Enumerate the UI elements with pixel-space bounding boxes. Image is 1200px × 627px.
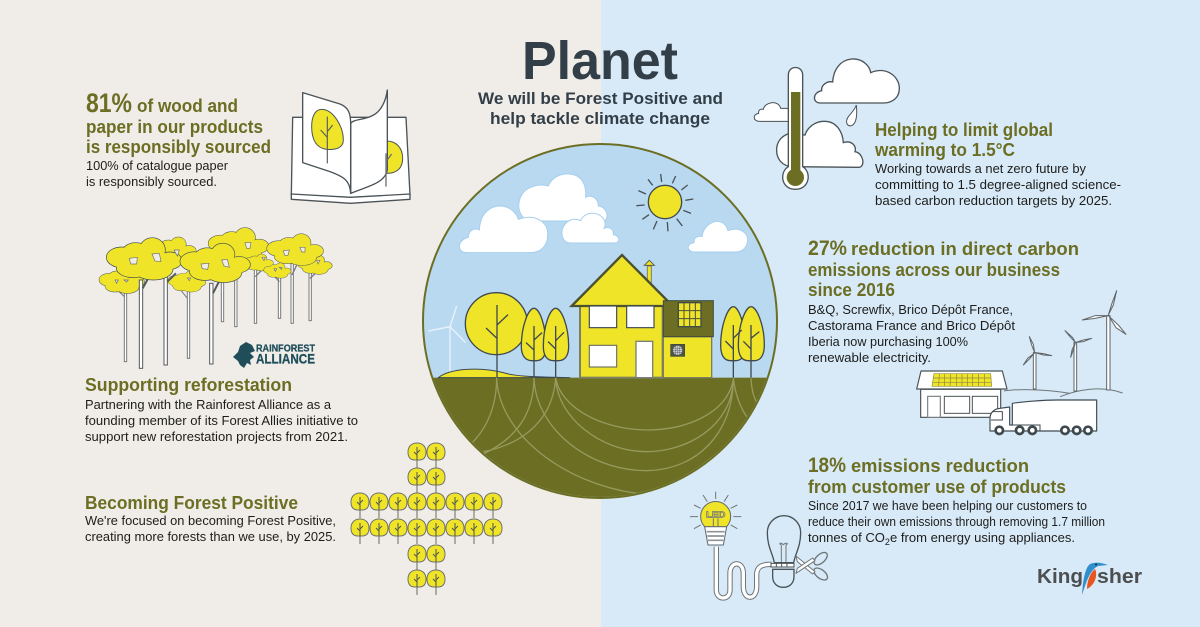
background: left beige panel <box>0 0 601 627</box>
central circle scene <box>420 144 790 511</box>
panel: 81% wood and paper text: paper in our products <box>86 117 263 137</box>
panel: helping to limit global warming text: warming to 1.5°C <box>874 140 1015 160</box>
icon: wind turbines, solar store and truck <box>917 291 1126 434</box>
panel: 27% reduction in direct carbon text <box>808 237 1079 365</box>
icon: plus sign of small trees <box>351 443 502 595</box>
panel: 27% reduction in direct carbon text: emissions across our business <box>808 260 1060 280</box>
panel: 18% emissions reduction text: 2 <box>885 537 890 547</box>
panel: becoming forest positive text: Becoming Forest Positive <box>85 493 298 513</box>
panel: 27% reduction in direct carbon text: reduction in direct carbon <box>851 239 1079 259</box>
panel: 18% emissions reduction text: from customer use of products <box>808 477 1066 497</box>
icon: kingfisher bird <box>1082 563 1108 595</box>
logo: Rainforest Alliance: RAINFOREST <box>256 342 316 354</box>
subtitle: help tackle climate change <box>490 109 710 128</box>
logo: Rainforest Alliance <box>233 342 316 368</box>
subtitle <box>478 89 723 128</box>
icon: thermometer and clouds <box>754 59 899 189</box>
panel: helping to limit global warming text <box>874 120 1121 208</box>
panel: 18% emissions reduction text: reduce their own emissions through removing 1.7 million <box>808 514 1105 529</box>
panel: becoming forest positive text: creating more forests than we use, by 2025. <box>85 529 336 544</box>
panel: 81% wood and paper text <box>86 88 271 189</box>
logo: Kingfisher: sher <box>1097 566 1142 588</box>
icon: open book with tree <box>291 90 410 203</box>
wind turbine <box>428 306 466 372</box>
panel: 18% emissions reduction text: emissions reduction <box>851 456 1029 476</box>
panel: 27% reduction in direct carbon text: Castorama France and Brico Dépôt <box>808 318 1015 333</box>
subtitle: We will be Forest Positive and <box>478 89 723 108</box>
panel: 81% wood and paper text: 81% <box>86 88 132 118</box>
title: Planet <box>522 31 678 91</box>
panel: 18% emissions reduction text: 18% <box>808 454 846 477</box>
panel: helping to limit global warming text: based carbon reduction targets by 2025. <box>875 193 1112 208</box>
panel: 18% emissions reduction text: e from energy using appliances. <box>890 530 1075 545</box>
panel: 27% reduction in direct carbon text: since 2016 <box>808 280 895 300</box>
panel: supporting reforestation text: founding member of its Forest Allies initiative to <box>85 413 358 428</box>
logo: Rainforest Alliance: ALLIANCE <box>256 350 315 366</box>
panel: 81% wood and paper text: 100% of catalogue paper <box>86 158 229 173</box>
panel: supporting reforestation text: Partnering with the Rainforest Alliance as a <box>85 397 332 412</box>
panel: supporting reforestation text: support new reforestation projects from 2021. <box>85 429 348 444</box>
panel: 18% emissions reduction text: tonnes of CO <box>808 530 885 545</box>
panel: 27% reduction in direct carbon text: 27% <box>808 237 847 260</box>
icon: LED bulb, cable, scissors and old bulb: LED <box>706 510 725 520</box>
panel: 81% wood and paper text: of wood and <box>137 96 238 116</box>
panel: 27% reduction in direct carbon text: renewable electricity. <box>808 350 931 365</box>
icon: forest canopy <box>99 228 332 368</box>
panel: 81% wood and paper text: is responsibly sourced <box>86 137 271 157</box>
logo: Kingfisher <box>1037 563 1142 595</box>
hill <box>438 369 570 378</box>
panel: 27% reduction in direct carbon text: Iberia now purchasing 100% <box>808 334 968 349</box>
panel: supporting reforestation text <box>85 375 358 444</box>
panel: becoming forest positive text <box>85 493 336 544</box>
panel: helping to limit global warming text: committing to 1.5 degree-aligned science- <box>875 177 1121 192</box>
panel: 18% emissions reduction text: Since 2017 we have been helping our customers to <box>808 498 1087 513</box>
panel: becoming forest positive text: We're focused on becoming Forest Positive, <box>85 513 336 528</box>
background: right blue panel <box>601 0 1200 627</box>
trees left of house <box>465 293 569 378</box>
panel: helping to limit global warming text: Helping to limit global <box>875 120 1053 140</box>
panel: 81% wood and paper text: is responsibly sourced. <box>86 174 217 189</box>
icon: LED bulb, cable, scissors and old bulb <box>690 492 830 598</box>
icon: frog <box>233 342 255 368</box>
panel: 18% emissions reduction text <box>808 454 1105 547</box>
house <box>572 255 713 378</box>
ground <box>434 378 766 497</box>
tree roots <box>472 378 758 493</box>
panel: 27% reduction in direct carbon text: B&Q, Screwfix, Brico Dépôt France, <box>808 302 1013 317</box>
sun <box>636 174 693 231</box>
panel: supporting reforestation text: Supporting reforestation <box>85 375 292 395</box>
trees right of house <box>721 307 764 378</box>
logo: Kingfisher: King <box>1037 566 1083 588</box>
panel: helping to limit global warming text: Working towards a net zero future by <box>875 161 1086 176</box>
clouds <box>459 174 748 253</box>
